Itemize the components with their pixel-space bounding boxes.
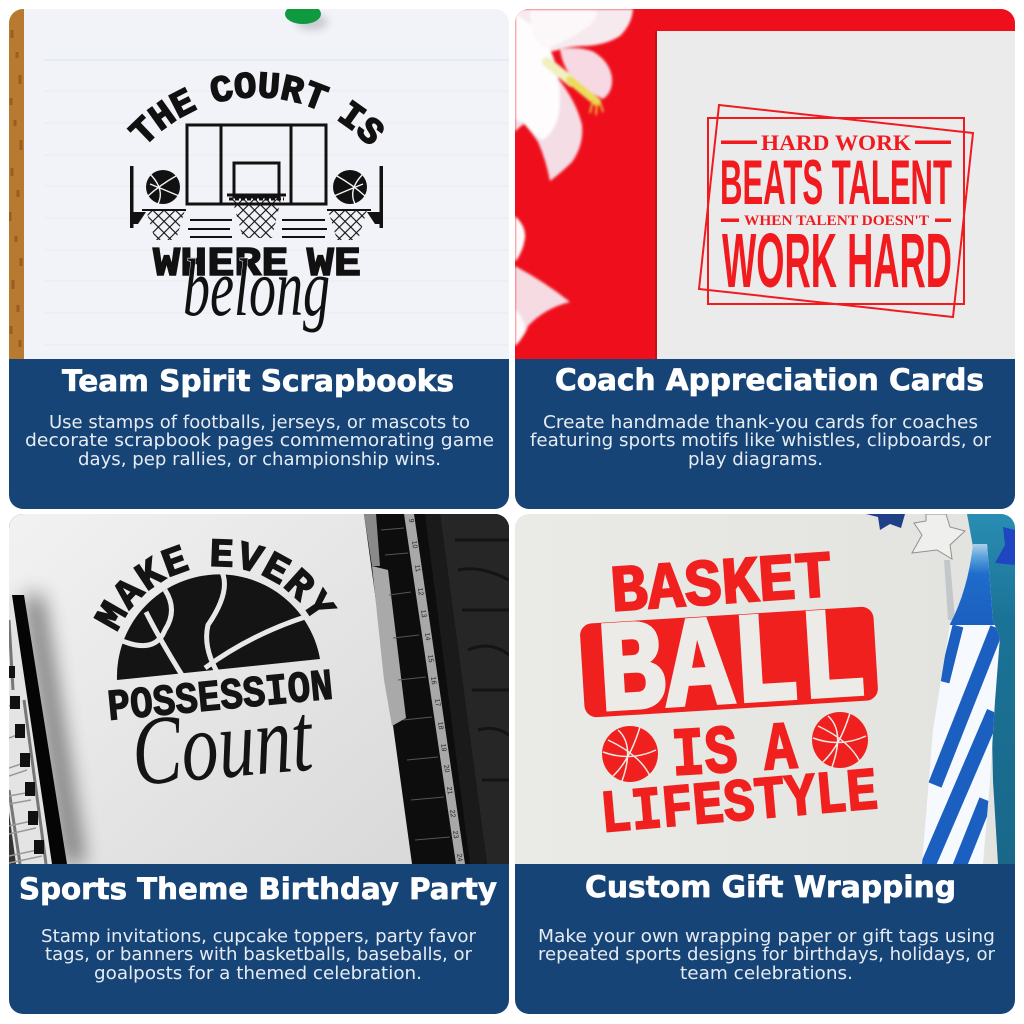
ruler: 23 xyxy=(451,830,459,839)
ruler: 18 xyxy=(436,721,444,730)
stamp frames xyxy=(699,105,973,317)
stamp text: is a: IS A xyxy=(670,711,799,796)
stamp text: when talent doesn't: WHEN TALENT DOESN'T xyxy=(744,213,929,229)
ruler: 10 xyxy=(410,540,418,549)
ruler: 16 xyxy=(429,676,437,685)
icon: backboard xyxy=(187,125,326,204)
panel: Team Spirit Scrapbooks xyxy=(9,9,509,509)
caption panel xyxy=(515,864,1015,1014)
stamp text: Where We: WHERE WE xyxy=(153,242,361,288)
ruler: 12 xyxy=(416,587,424,596)
description: decorate scrapbook pages commemorating game xyxy=(25,431,494,451)
caption panel xyxy=(515,359,1015,509)
description: featuring sports motifs like whistles, clipboards, or xyxy=(530,431,992,451)
ruler: 9 xyxy=(407,518,415,523)
ruler: 14 xyxy=(423,632,431,641)
stamp: Make Every Possession Count xyxy=(93,538,338,784)
tab xyxy=(372,566,406,726)
stamp: The Court Is Where We Belong xyxy=(126,72,384,332)
icon: silver star xyxy=(912,514,965,559)
badge: ball: BALL xyxy=(594,588,871,749)
panel: Sports Theme Birthday Party xyxy=(9,514,509,1014)
description: days, pep rallies, or championship wins. xyxy=(78,450,441,470)
icon: speed lines xyxy=(188,220,327,237)
description: Make your own wrapping paper or gift tags using xyxy=(538,927,995,947)
description: Use stamps of footballs, jerseys, or mascots to xyxy=(49,413,470,433)
description: goalposts for a themed celebration. xyxy=(94,964,422,984)
caption panel xyxy=(9,359,509,509)
icon: right basketball and hoop xyxy=(327,166,383,240)
icon: left basketball and hoop xyxy=(130,166,186,240)
photo: lined paper on corkboard xyxy=(9,4,509,359)
stamp text: arc heading: MAKE EVERY xyxy=(93,538,338,632)
description: play diagrams. xyxy=(688,450,823,470)
stamp text: hard work: HARD WORK xyxy=(761,130,911,155)
ruler: 24 xyxy=(455,853,463,862)
stamp: Hard Work Beats Talent xyxy=(699,105,973,317)
description: Create handmade thank-you cards for coaches xyxy=(543,413,978,433)
icon: small blue star xyxy=(995,527,1015,565)
heading: Team Spirit Scrapbooks xyxy=(62,364,454,398)
description: repeated sports designs for birthdays, holidays, or xyxy=(538,945,996,965)
ruler: 13 xyxy=(419,609,427,618)
icon: centre hoop and net xyxy=(227,195,286,238)
description xyxy=(25,413,494,470)
photo: notebook, ruler and dark desk xyxy=(9,514,509,864)
icon: striped candle xyxy=(920,540,1010,870)
heading: Coach Appreciation Cards xyxy=(555,363,984,397)
wood surface xyxy=(440,514,509,864)
stamp text: script count: Count xyxy=(128,683,318,807)
icon: right basketball xyxy=(812,712,868,768)
heading: Sports Theme Birthday Party xyxy=(19,872,497,906)
icon: left basketball xyxy=(602,726,658,782)
ruler xyxy=(381,514,465,864)
icon: green push pin xyxy=(285,9,321,24)
ruler: 11 xyxy=(413,564,421,573)
icon: top flower xyxy=(515,9,633,181)
stamp text: basket: BASKET xyxy=(608,541,835,631)
description xyxy=(538,927,996,984)
icon: lower flower xyxy=(515,216,570,346)
icon: blue star xyxy=(866,514,905,530)
stamp text: arc heading: THE COURT IS xyxy=(126,72,384,144)
ruler: 19 xyxy=(439,743,447,752)
stick of silver star xyxy=(944,560,955,620)
photo: red background, white card and flowers xyxy=(515,9,1015,359)
description: Stamp invitations, cupcake toppers, party favor xyxy=(41,927,477,947)
description: team celebrations. xyxy=(680,964,853,984)
ruler: 15 xyxy=(426,654,434,663)
stamp: Basketball Is A Lifestyle xyxy=(578,541,881,851)
panel: Custom Gift Wrapping xyxy=(515,514,1015,1014)
stamp text: lifestyle: LIFESTYLE xyxy=(598,759,881,851)
description xyxy=(41,927,477,984)
notebook xyxy=(9,594,82,864)
ruler: 22 xyxy=(448,809,456,818)
panel: Coach Appreciation Cards xyxy=(515,9,1015,509)
stamp text: script belong: belong xyxy=(183,242,330,333)
ruler: 17 xyxy=(433,698,441,707)
ruler: 21 xyxy=(445,786,453,795)
ruler: 20 xyxy=(442,764,450,773)
description: tags, or banners with basketballs, baseballs, or xyxy=(45,945,473,965)
description xyxy=(530,413,992,470)
heading: Custom Gift Wrapping xyxy=(585,870,956,904)
stamp text: possession: POSSESSION xyxy=(106,663,335,734)
caption panel xyxy=(9,864,509,1014)
icon: half basketball xyxy=(117,570,320,680)
photo: paper, stars and striped candle xyxy=(515,514,1015,870)
